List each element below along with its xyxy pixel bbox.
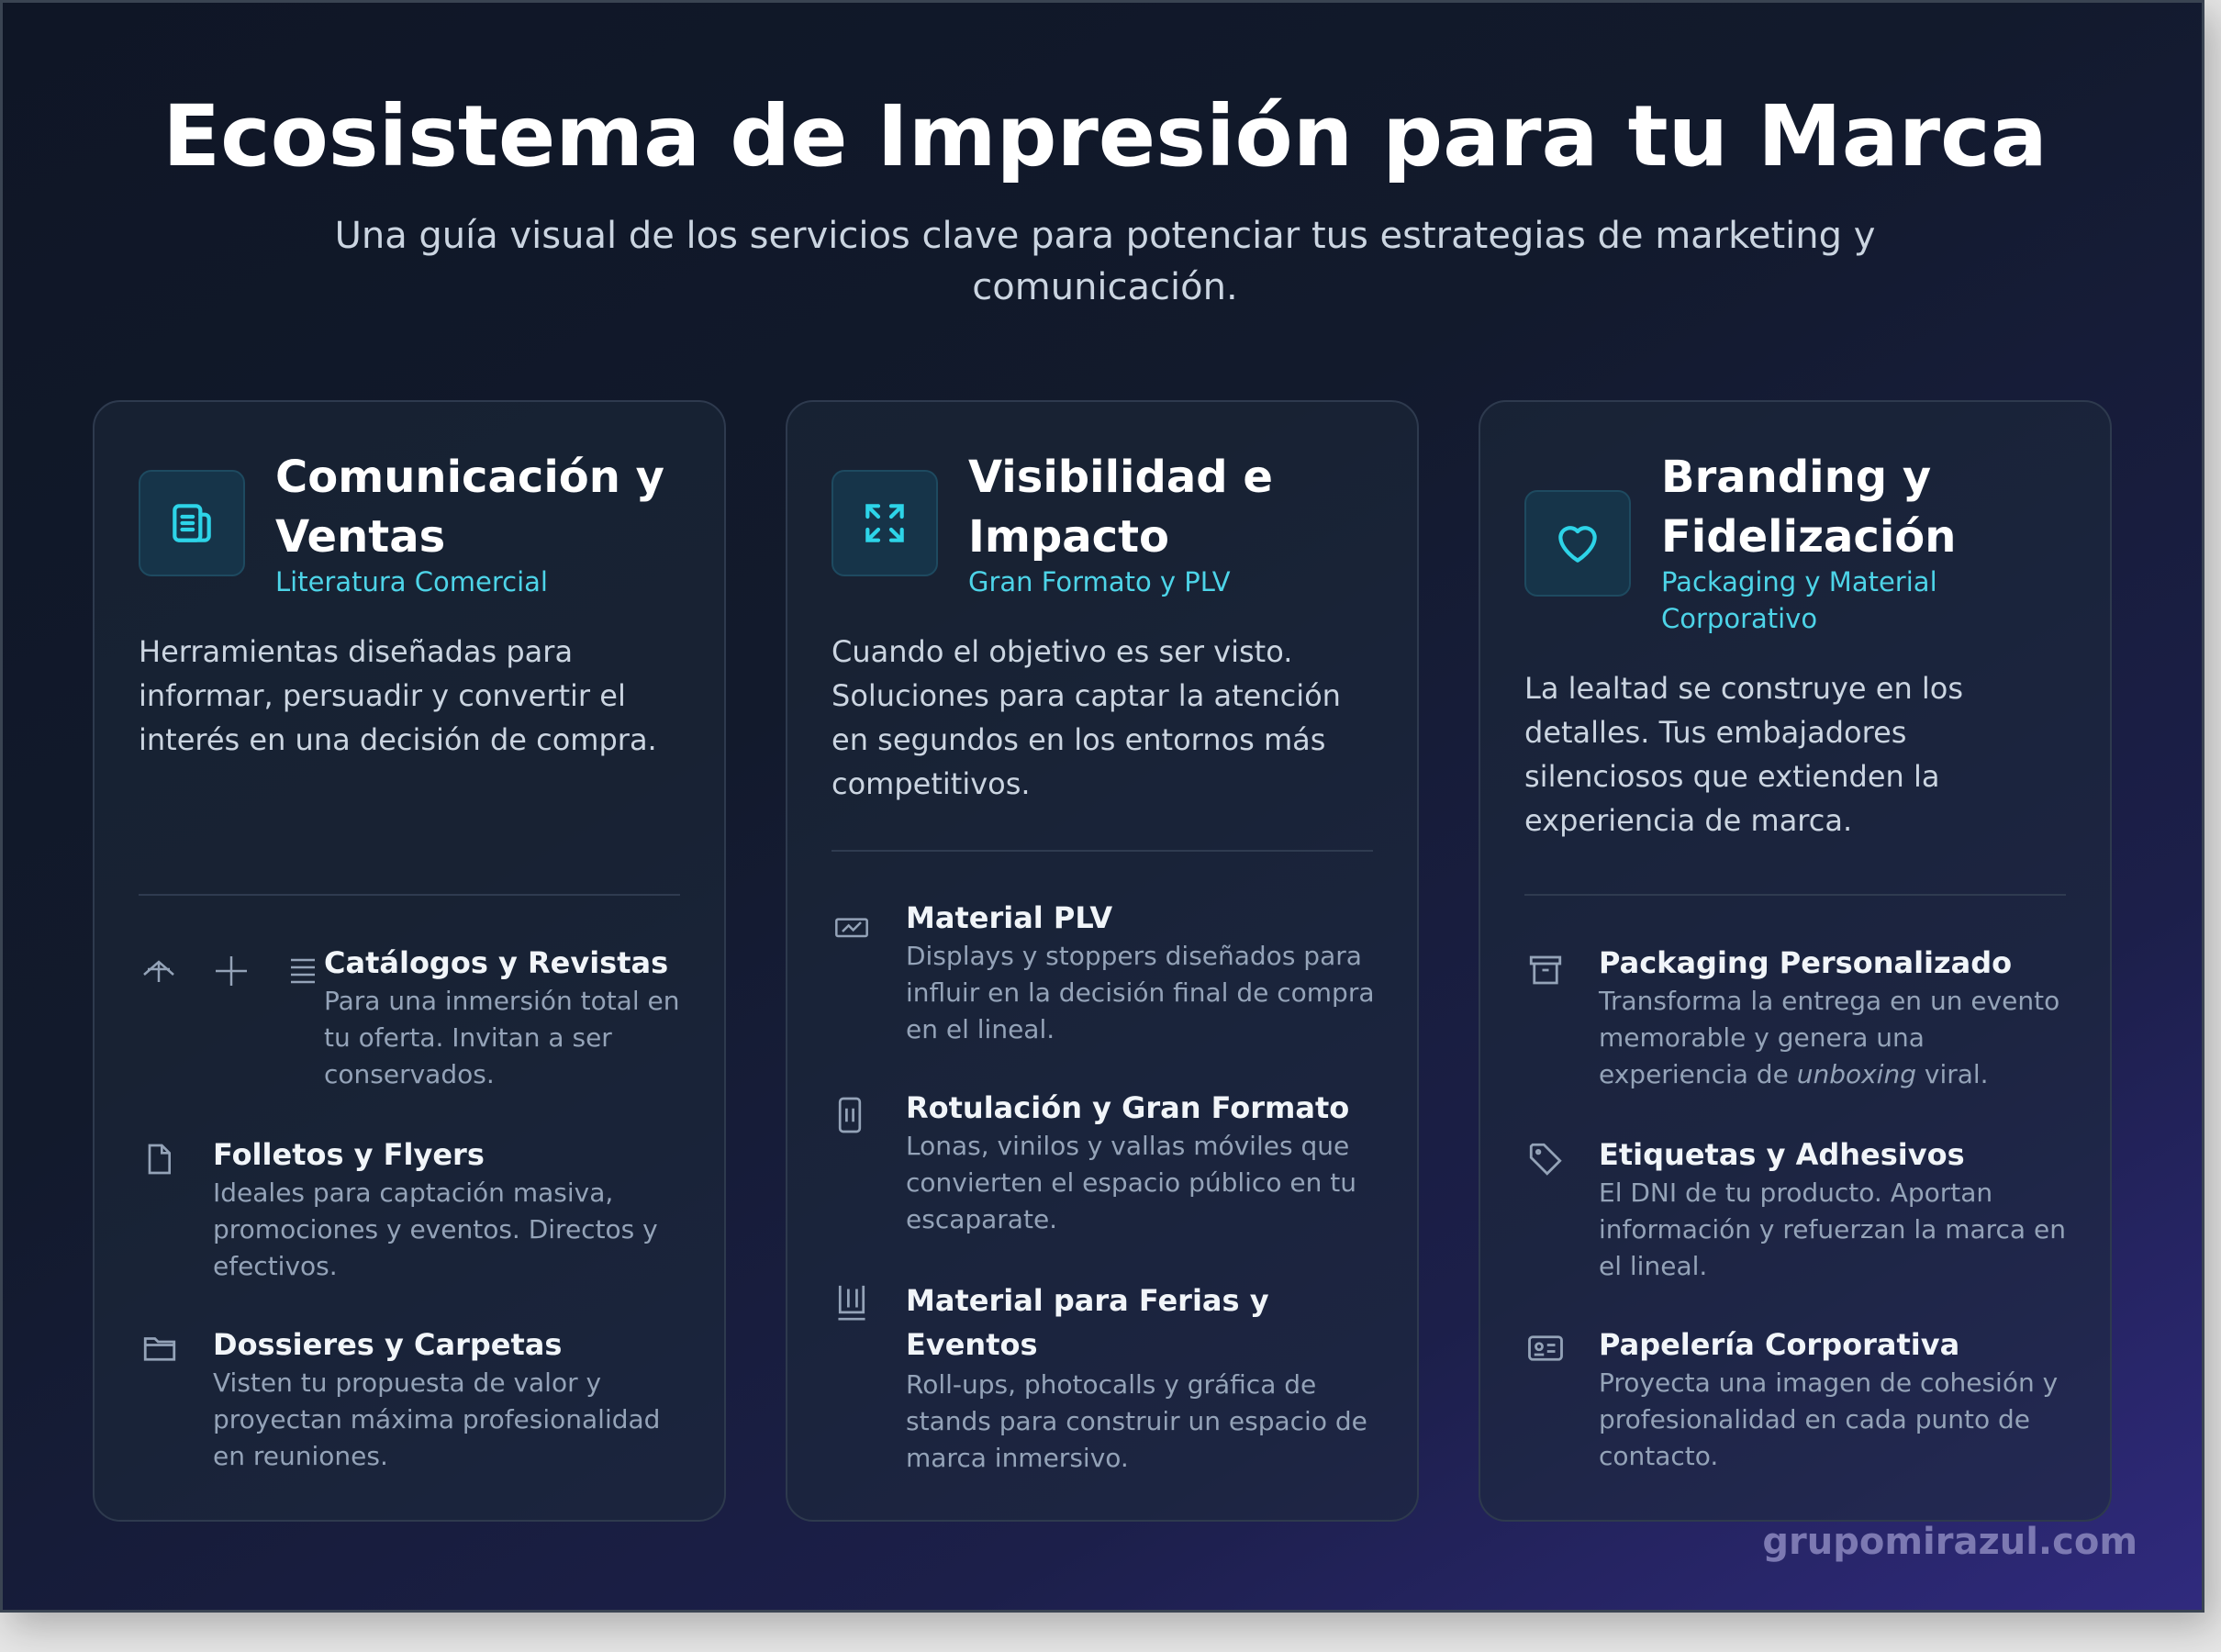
description: [1524, 671, 1963, 838]
description: experiencia de marca.: [1524, 803, 1852, 838]
item: folletos: promociones y eventos. Directos y: [213, 1214, 658, 1245]
icon: display: [835, 918, 868, 938]
item: ferias: Material para Ferias y: [906, 1283, 1269, 1318]
subtitle: comunicación.: [972, 266, 1238, 308]
item: ferias: [906, 1283, 1367, 1473]
description: Cuando el objetivo es ser visto.: [831, 634, 1292, 669]
item: folletos: Ideales para captación masiva,: [213, 1178, 613, 1208]
description: detalles. Tus embajadores: [1524, 715, 1906, 750]
item: ferias: marca inmersivo.: [906, 1443, 1129, 1473]
icon: box: [1529, 956, 1562, 984]
item: dossieres: Visten tu propuesta de valor y: [213, 1367, 601, 1398]
description: La lealtad se construye en los: [1524, 671, 1963, 706]
icon: heart: [1524, 490, 1631, 597]
item: folletos: efectivos.: [213, 1251, 338, 1281]
heading: Fidelización: [1661, 511, 1956, 563]
heading: Comunicación y: [275, 452, 664, 503]
description: interés en una decisión de compra.: [139, 722, 657, 757]
watermark: grupomirazul.com: [1762, 1521, 2137, 1563]
icon: tag: [1529, 1144, 1562, 1176]
item: packaging: Packaging Personalizado: [1599, 945, 2012, 980]
item: catálogos: Catálogos y Revistas: [324, 945, 668, 980]
item: folletos: Folletos y Flyers: [213, 1137, 485, 1172]
heading: [968, 452, 1273, 563]
item: dossieres: proyectan máxima profesionalidad: [213, 1404, 660, 1434]
heading: Impacto: [968, 511, 1169, 563]
description: en segundos en los entornos más: [831, 722, 1325, 757]
title: Ecosistema de Impresión para tu Marca: [162, 87, 2048, 185]
item: etiquetas: [1599, 1137, 2066, 1281]
heading: [275, 452, 664, 563]
item: ferias: Eventos: [906, 1327, 1038, 1362]
item: etiquetas: El DNI de tu producto. Aportan: [1599, 1178, 1992, 1208]
item: ferias: Roll-ups, photocalls y gráfica de: [906, 1369, 1316, 1400]
description: informar, persuadir y convertir el: [139, 678, 626, 713]
item: rotulación: convierten el espacio público en tu: [906, 1167, 1356, 1198]
item: etiquetas: información y refuerzan la marca en: [1599, 1214, 2066, 1245]
category: [1661, 566, 1937, 634]
panel: visibilidad e impacto: [786, 400, 1419, 1522]
item: packaging: Transforma la entrega en un evento: [1599, 986, 2059, 1016]
item: material PLV: Material PLV: [906, 900, 1112, 935]
heading: Visibilidad e: [968, 452, 1273, 503]
item: packaging: memorable y genera una: [1599, 1022, 1925, 1053]
item: rotulación: [906, 1090, 1356, 1234]
icon: document: [139, 470, 245, 576]
item: folletos: [213, 1137, 658, 1281]
category: Literatura Comercial: [275, 566, 548, 597]
item: ferias: stands para construir un espacio de: [906, 1406, 1367, 1436]
panel: branding y fidelización: [1479, 400, 2112, 1522]
category: Packaging y Material: [1661, 566, 1937, 597]
heading: [1661, 452, 1956, 563]
item: catálogos: tu oferta. Invitan a ser: [324, 1022, 612, 1053]
category: Gran Formato y PLV: [968, 566, 1231, 597]
item: papelería: contacto.: [1599, 1441, 1718, 1471]
icon: stand: [838, 1285, 865, 1320]
description: Herramientas diseñadas para: [139, 634, 573, 669]
item: rotulación: escaparate.: [906, 1204, 1057, 1234]
icon: folder: [143, 1337, 176, 1361]
subtitle: [335, 215, 1875, 308]
item: etiquetas: el lineal.: [1599, 1251, 1707, 1281]
item: papelería: profesionalidad en cada punto de: [1599, 1404, 2030, 1434]
description: competitivos.: [831, 766, 1031, 801]
item: material PLV: [906, 900, 1375, 1044]
category: Corporativo: [1661, 603, 1817, 634]
item: packaging: experiencia de unboxing viral.: [1599, 1059, 1989, 1089]
item: rotulación: Rotulación y Gran Formato: [906, 1090, 1349, 1125]
item: etiquetas: Etiquetas y Adhesivos: [1599, 1137, 1965, 1172]
description: [831, 634, 1341, 801]
item: material PLV: Displays y stoppers diseñados para: [906, 941, 1362, 971]
description: silenciosos que extienden la: [1524, 759, 1939, 794]
item: material PLV: en el lineal.: [906, 1014, 1055, 1044]
description: [139, 634, 657, 757]
heading: Branding y: [1661, 452, 1931, 503]
item: dossieres: en reuniones.: [213, 1441, 388, 1471]
item: rotulación: Lonas, vinilos y vallas móviles que: [906, 1131, 1349, 1161]
icon: expand: [831, 470, 938, 576]
item: catálogos: conservados.: [324, 1059, 495, 1089]
item: papelería: Proyecta una imagen de cohesión y: [1599, 1367, 2058, 1398]
panel: comunicación y ventas: [93, 400, 726, 1522]
icon: id card: [1528, 1335, 1563, 1361]
subtitle: Una guía visual de los servicios clave para potenciar tus estrategias de marketing y: [335, 215, 1875, 257]
heading: Ventas: [275, 511, 445, 563]
item: catálogos: Para una inmersión total en: [324, 986, 679, 1016]
item: packaging: [1599, 945, 2059, 1089]
icons: catalog: [143, 956, 315, 986]
item: dossieres: Dossieres y Carpetas: [213, 1327, 562, 1362]
description: Soluciones para captar la atención: [831, 678, 1341, 713]
item: dossieres: [213, 1327, 660, 1471]
icon: file: [149, 1144, 171, 1175]
item: material PLV: influir en la decisión final de compra: [906, 977, 1375, 1008]
item: catálogos: [324, 945, 679, 1089]
item: papelería: [1599, 1327, 2058, 1471]
item: papelería: Papelería Corporativa: [1599, 1327, 1959, 1362]
icon: sign: [839, 1098, 861, 1133]
